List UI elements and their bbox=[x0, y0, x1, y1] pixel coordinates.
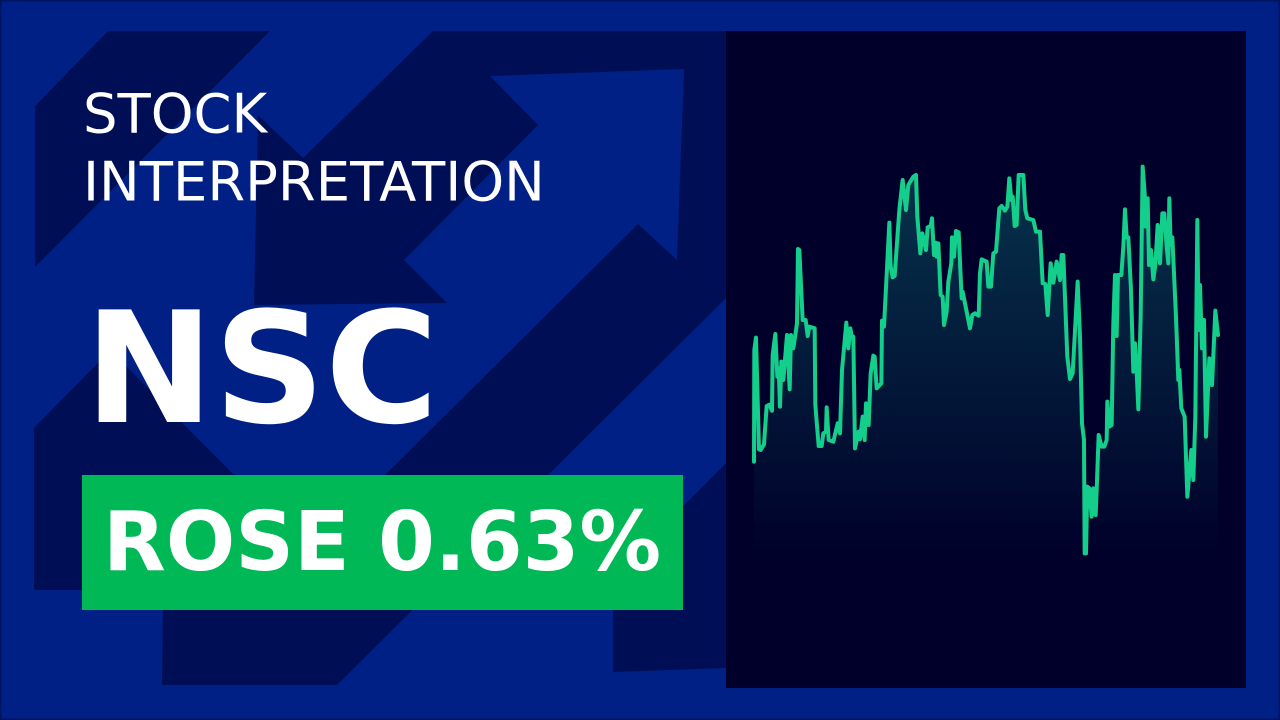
change badge bbox=[82, 475, 683, 610]
area fill under line bbox=[754, 167, 1218, 560]
price chart bbox=[754, 167, 1218, 560]
background arrows bbox=[34, 31, 726, 685]
heading: STOCK bbox=[83, 82, 269, 146]
heading bbox=[83, 82, 545, 214]
heading: INTERPRETATION bbox=[83, 150, 545, 214]
ticker symbol: NSC bbox=[84, 280, 438, 459]
change badge: ROSE 0.63% bbox=[103, 495, 661, 590]
chart panel bbox=[726, 31, 1246, 688]
price line bbox=[754, 167, 1218, 553]
